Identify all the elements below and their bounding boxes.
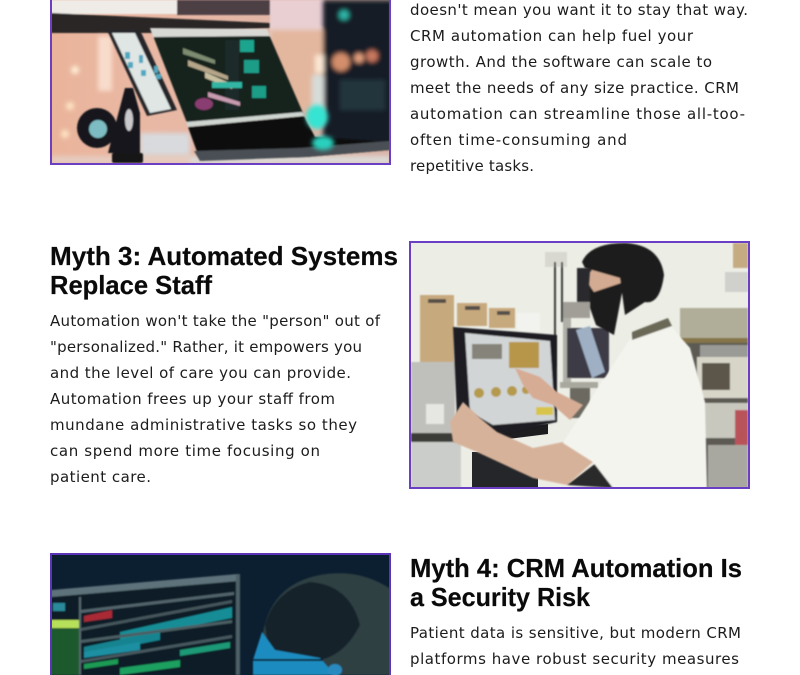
shirt <box>563 322 707 488</box>
text: myth 3 paragraph: can spend more time focusing on <box>50 442 320 460</box>
text: myth 4 paragraph: Patient data is sensitive, but modern CRM <box>410 624 741 642</box>
heading: myth 4: Myth 4: CRM Automation Is <box>410 553 742 583</box>
text: myth 2 closing paragraph: growth. And the software can scale to <box>410 53 712 71</box>
laptop <box>150 28 390 161</box>
sidebar <box>51 620 79 628</box>
text: myth 3 paragraph <box>50 312 381 486</box>
text: myth 4 paragraph <box>410 624 741 668</box>
face <box>588 268 622 294</box>
text: myth 3 paragraph: Automation won't take the "person" out of <box>50 312 381 330</box>
kiosk screen <box>453 327 557 435</box>
image: staff member using a touchscreen kiosk <box>410 242 749 488</box>
heading: myth 3 <box>50 241 398 300</box>
text: myth 3 paragraph: patient care. <box>50 468 151 486</box>
text: myth 2 closing paragraph: meet the needs of any size practice. CRM <box>410 79 739 97</box>
text: myth 2 closing paragraph: repetitive tasks. <box>410 157 534 175</box>
mask <box>589 282 623 336</box>
heading: myth 3: Replace Staff <box>50 270 212 300</box>
text: myth 3 paragraph: "personalized." Rather, it empowers you <box>50 338 362 356</box>
hooded figure <box>253 573 392 675</box>
text: myth 2 closing paragraph <box>410 1 748 175</box>
left cabinet <box>411 362 455 433</box>
person <box>450 243 707 488</box>
kiosk stand <box>472 452 538 488</box>
wall shelving <box>563 302 590 318</box>
text: myth 2 closing paragraph: often time-consuming and <box>410 131 627 149</box>
outlet and cables <box>545 252 567 267</box>
text: myth 3 paragraph: Automation frees up your staff from <box>50 390 335 408</box>
speaker, stand and glow <box>306 105 334 150</box>
table and background tints <box>51 36 390 164</box>
text: myth 2 closing paragraph: automation can streamline those all-too- <box>410 105 745 123</box>
heading: myth 4: a Security Risk <box>410 582 591 612</box>
image: hooded hacker at code screen <box>51 554 392 675</box>
heading: myth 4 <box>410 553 742 612</box>
text: myth 2 closing paragraph: CRM automation can help fuel your <box>410 27 694 45</box>
right dark bokeh area <box>270 0 393 145</box>
text: myth 3 paragraph: and the level of care you can provide. <box>50 364 351 382</box>
code lines <box>81 592 234 613</box>
heading: myth 3: Myth 3: Automated Systems <box>50 241 398 271</box>
lower arm and hand <box>450 402 593 485</box>
right shelves <box>684 342 748 487</box>
hair <box>582 243 664 315</box>
apron strap <box>632 318 672 340</box>
monitor frame <box>51 574 240 675</box>
text: myth 2 closing paragraph: doesn't mean you want it to stay that way. <box>410 1 748 19</box>
text: myth 4 paragraph: platforms have robust security measures <box>410 650 739 668</box>
image: phone and laptop on desk <box>51 0 393 165</box>
pointing arm <box>515 368 583 420</box>
text: myth 3 paragraph: mundane administrative tasks so they <box>50 416 357 434</box>
clipboards <box>420 295 454 362</box>
